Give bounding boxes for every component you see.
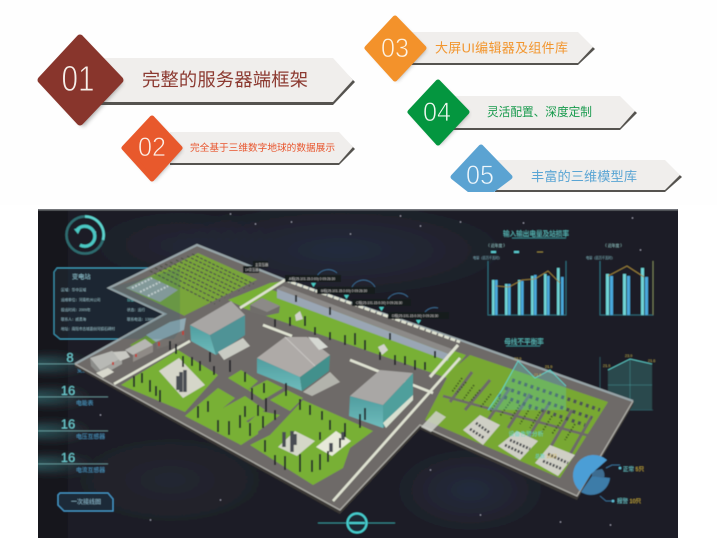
unbalance area chart left overlay: 21.6: [534, 373, 541, 377]
unbalance area chart left overlay: 23.9: [514, 357, 521, 361]
stat: electric meters 16: [38, 385, 109, 409]
3D substation dashboard screenshot: [19, 200, 685, 543]
device labels with markers: 1#变压器: [245, 267, 259, 272]
annual bar chart: 电量（百万千瓦时）: [586, 255, 615, 260]
feature 01: complete server framework: 完整的服务器端框架: [142, 69, 308, 90]
circular rotate icon: [66, 216, 104, 254]
feature 03: large-screen UI editor: 03: [381, 33, 409, 63]
feature 02: digital earth data display: 完全基于三维数字地球的数据展示: [190, 141, 335, 154]
device labels with markers: C相(25.101.15.0.00) 0 09:26:30: [356, 300, 403, 305]
unbalance area chart right: 23.9: [625, 354, 632, 358]
bus unbalance rate heading: 母线不平衡率: [504, 337, 544, 346]
header background: [0, 0, 717, 205]
one-line diagram button: 一次接线图: [71, 498, 101, 506]
substation info panel: [52, 266, 160, 340]
input output power bar chart: 电量（百万千瓦时）: [473, 255, 502, 260]
input output power bar chart: [473, 229, 569, 315]
right teal building: [349, 370, 413, 428]
device status heading: 设备告警分析: [509, 430, 544, 438]
substation info panel: 状态：运行: [127, 307, 145, 312]
device labels with markers: A相(25.101.15.0.00) 0 09:26:30: [289, 276, 335, 281]
substation info panel: 联系人：戚勇海: [61, 316, 87, 322]
platform bright edge: [75, 245, 633, 401]
feature 01: complete server framework: [41, 38, 355, 127]
stat: current transformers 16: 电流互感器: [76, 466, 105, 474]
small service buildings: [250, 298, 388, 355]
stat: current transformers 16: 16: [61, 450, 75, 465]
feature 04: flexible configuration: 04: [423, 97, 451, 127]
feature 03: large-screen UI editor: 大屏UI编辑器及组件库: [435, 40, 568, 56]
substation info panel: 区域：华中区域: [61, 287, 87, 292]
bottom navigation icon: [318, 514, 395, 532]
feature 04: flexible configuration: [410, 82, 637, 145]
right wing road grid: [430, 345, 592, 458]
substation info panel: 地址：南阳市古城县纷河镇石碑村: [61, 326, 115, 331]
left teal building: [190, 301, 250, 360]
one-line diagram button: [58, 493, 113, 511]
substation info panel: 投运时间：2009年: [61, 307, 91, 312]
unbalance area chart right: [600, 354, 655, 410]
platform rim: [75, 366, 633, 514]
unbalance area chart left overlay: [488, 357, 566, 410]
3D substation model: [75, 245, 633, 514]
unbalance area chart left overlay: 21.9: [545, 365, 552, 369]
central teal building: [257, 337, 340, 396]
long gallery building: [277, 286, 452, 361]
annual bar chart: （ 近年度 ）: [603, 243, 624, 248]
stat: voltage transformers 16: 电压互感器: [76, 432, 105, 440]
stat: electric meters 16: 16: [61, 383, 75, 398]
substation info panel: 运维单位：河南杭州公司: [61, 297, 101, 302]
substation info panel: 变电站: [72, 273, 91, 281]
device labels with markers: 主变压器: [255, 262, 269, 267]
stat: voltage transformers 16: 16: [61, 416, 75, 432]
stat: transformers 8: 变压器: [77, 366, 94, 374]
feature 05: 3D model library: 丰富的三维模型库: [531, 168, 637, 184]
right wing lawns: [425, 355, 608, 478]
feature 02: digital earth data display: [124, 118, 355, 181]
feature 04: flexible configuration: 灵活配置、深度定制: [487, 105, 592, 119]
feature 02: digital earth data display: 02: [138, 132, 166, 162]
feature 05: 3D model library: 05: [466, 160, 494, 190]
feature 05: 3D model library: [440, 147, 682, 198]
switchgear grid: [498, 380, 600, 425]
device labels with markers: D相(25.101.15.0.00) 0 09:26:30: [392, 313, 439, 318]
feature 03: large-screen UI editor: [367, 18, 595, 81]
trees: [134, 295, 435, 472]
stat: current transformers 16: [38, 452, 109, 476]
substation yard lawn: [126, 253, 258, 316]
transformer pads: [159, 358, 351, 456]
input output power bar chart: 输入输出电量及站损率: [503, 229, 569, 238]
control rooms row: [90, 318, 186, 378]
stat: transformers 8: [38, 352, 85, 376]
platform top: [75, 245, 633, 510]
stat: electric meters 16: 电能表: [76, 399, 94, 407]
device labels with markers: B相(25.101.15.0.00) 0 09:26:30: [321, 288, 367, 293]
substation info panel: 联系电话：13889000000: [127, 316, 167, 322]
device status pie chart: [573, 455, 620, 501]
unbalance area chart right: 21.6: [648, 359, 655, 363]
info panel overlay on model: [109, 268, 180, 339]
white roads: [114, 280, 460, 501]
unbalance area chart right: 21.9: [603, 364, 610, 368]
central lawns: [121, 281, 466, 485]
pie legend: alarm: [612, 497, 642, 505]
device status legend: 总数 15只: [535, 453, 557, 460]
pie legend: alarm: 报警 10只: [617, 497, 642, 505]
pie legend: normal: [619, 465, 645, 473]
annual bar chart: [586, 243, 653, 315]
pie legend: normal: 正常 5只: [623, 465, 645, 473]
device labels with markers: [243, 261, 449, 324]
stat: transformers 8: 8: [66, 350, 74, 365]
substation info panel: 设备数量: [127, 297, 142, 302]
space background: [30, 200, 685, 543]
stat: voltage transformers 16: [38, 418, 109, 443]
feature 01: complete server framework: 01: [62, 58, 94, 99]
input output power bar chart: （ 近年度 ）: [486, 243, 507, 248]
substation yard equipment: [126, 254, 258, 316]
capacitor banks: [463, 415, 575, 476]
